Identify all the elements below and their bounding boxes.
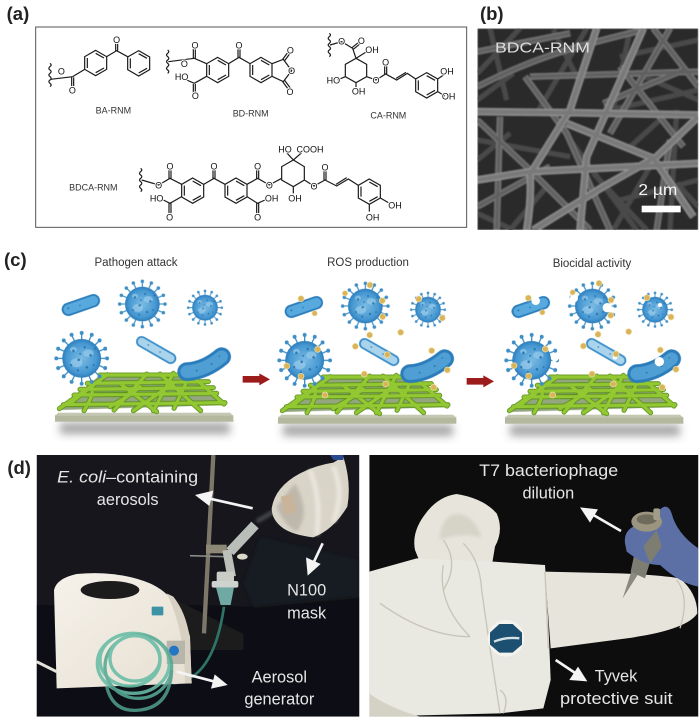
structure: BDCA-RNM: OH [265, 193, 278, 203]
structure: BDCA-RNM: OH [288, 193, 302, 203]
structure: BDCA-RNM: COOH [297, 144, 323, 154]
heading: Pathogen attack: Pathogen attack [94, 257, 178, 269]
scene: ROS production [278, 282, 456, 436]
panel: (d) left photo, aerosol setup [7, 455, 359, 717]
structure frame [36, 27, 467, 227]
scene: pathogen attack [55, 280, 233, 434]
structure: BD-RNM: HO [175, 72, 188, 82]
label: T7 bacteriophage dilution [479, 462, 618, 502]
panel label d: (d) [7, 457, 31, 478]
heading: Biocidal activity: Biocidal activity [553, 258, 632, 270]
arrow: generator [177, 672, 228, 689]
panel: (a) chemical structures [7, 3, 467, 227]
green tube coil [97, 633, 172, 710]
nebulizer tube [173, 607, 224, 683]
structure: CA-RNM: O [358, 36, 365, 46]
structure: BDCA-RNM: O [166, 213, 173, 223]
structure: BDCA-RNM: O [210, 162, 217, 172]
suit badge [488, 620, 524, 657]
structure: BDCA-RNM: O [155, 180, 162, 190]
label: Aerosol generator [244, 668, 315, 708]
label CA-RNM: CA-RNM [370, 111, 406, 121]
structure: BDCA-RNM: O [310, 181, 317, 191]
structure: BD-RNM: O [191, 40, 198, 50]
arrow: ROS to biocidal [467, 375, 494, 387]
structure: BD-RNM: O [181, 59, 188, 69]
structure: BD-RNM: O [286, 87, 293, 97]
label: T7 bacteriophage dilution: T7 bacteriophage [479, 462, 618, 480]
structure: BDCA-RNM: O [266, 180, 273, 190]
panel label b: (b) [480, 3, 504, 24]
panel label a: (a) [7, 3, 29, 24]
SEM image [477, 28, 698, 230]
structure: CA-RNM: O [382, 58, 389, 68]
structure: BA-RNM: O [69, 86, 76, 96]
label: T7 bacteriophage dilution: dilution [522, 484, 574, 502]
structure: CA-RNM: HO [327, 75, 340, 85]
label: Aerosol generator: Aerosol [252, 668, 307, 686]
protective suit [369, 494, 697, 717]
label: Tyvek protective suit: protective suit [560, 690, 673, 708]
structure: BDCA-RNM: OH [388, 200, 402, 210]
structure: BD-RNM: O [288, 66, 295, 76]
label: Tyvek protective suit [560, 668, 673, 708]
structure: BDCA-RNM: O [321, 162, 328, 172]
aerosol generator [37, 573, 192, 688]
structure: CA-RNM [327, 33, 455, 121]
N100 mask [272, 455, 349, 537]
pipette and glove [623, 507, 698, 598]
arrow: Tyvek [556, 660, 587, 681]
structure: BDCA-RNM: HO [278, 144, 292, 154]
mist [257, 512, 273, 522]
photo [37, 455, 359, 717]
arrow: aerosols [195, 491, 253, 508]
structure: CA-RNM: OH [442, 92, 455, 102]
label: Aerosol generator: generator [244, 690, 315, 708]
structure: BD-RNM: O [287, 45, 294, 55]
arrow: attack to ROS [243, 373, 270, 385]
label BDCA-RNM: BDCA-RNM [69, 183, 118, 193]
arrow: mask [306, 543, 323, 576]
stand plate [179, 605, 244, 650]
scale bar label: 2 µm [638, 182, 677, 199]
panel label c: (c) [4, 249, 27, 270]
label BD-RNM: BD-RNM [233, 108, 269, 118]
nebulizer [190, 525, 255, 605]
stand rod [204, 455, 213, 633]
label BA-RNM: BA-RNM [96, 106, 131, 116]
structure: CA-RNM: O [372, 75, 379, 85]
structure: BD-RNM: O [235, 40, 242, 50]
label: E. coli-containing aerosols: E. coli–containing [57, 469, 198, 487]
structure: CA-RNM: OH [365, 45, 379, 55]
label: N100 mask: mask [287, 604, 327, 622]
label: Tyvek protective suit: Tyvek [595, 668, 638, 686]
structure: BDCA-RNM [69, 144, 402, 223]
structure: CA-RNM: OH [352, 87, 365, 97]
label: E. coli-containing aerosols: aerosols [97, 491, 159, 509]
structure: BA-RNM [49, 35, 150, 116]
arrow: T7 [580, 507, 621, 531]
structure: BD-RNM: O [192, 91, 199, 101]
structure: CA-RNM: OH [440, 67, 454, 77]
heading: ROS production: ROS production [327, 257, 409, 269]
panel: (b) SEM micrograph [477, 3, 698, 230]
SEM label: BDCA-RNM [495, 41, 590, 57]
panel: (d) right photo, protective suit [369, 455, 698, 717]
structure: BDCA-RNM: OH [366, 213, 379, 223]
label: N100 mask: N100 [287, 582, 326, 600]
structure: BA-RNM: O [58, 67, 65, 77]
structure: BDCA-RNM: O [166, 162, 173, 172]
panel: (c) mechanism [4, 249, 683, 436]
scale bar [642, 206, 681, 212]
structure: CA-RNM: O [338, 37, 345, 47]
structure: BD-RNM [166, 40, 295, 118]
label: E. coli-containing aerosols [57, 469, 198, 509]
scene: biocidal activity [505, 282, 683, 436]
structure: BDCA-RNM: O [254, 162, 261, 172]
membrane damage notches [531, 294, 664, 366]
structure: BDCA-RNM: O [254, 213, 261, 223]
reactive oxygen species particles [284, 280, 679, 398]
structure: BA-RNM: O [113, 35, 120, 45]
structure: BDCA-RNM: HO [150, 193, 163, 203]
label: N100 mask [287, 582, 327, 622]
photo [369, 455, 698, 717]
